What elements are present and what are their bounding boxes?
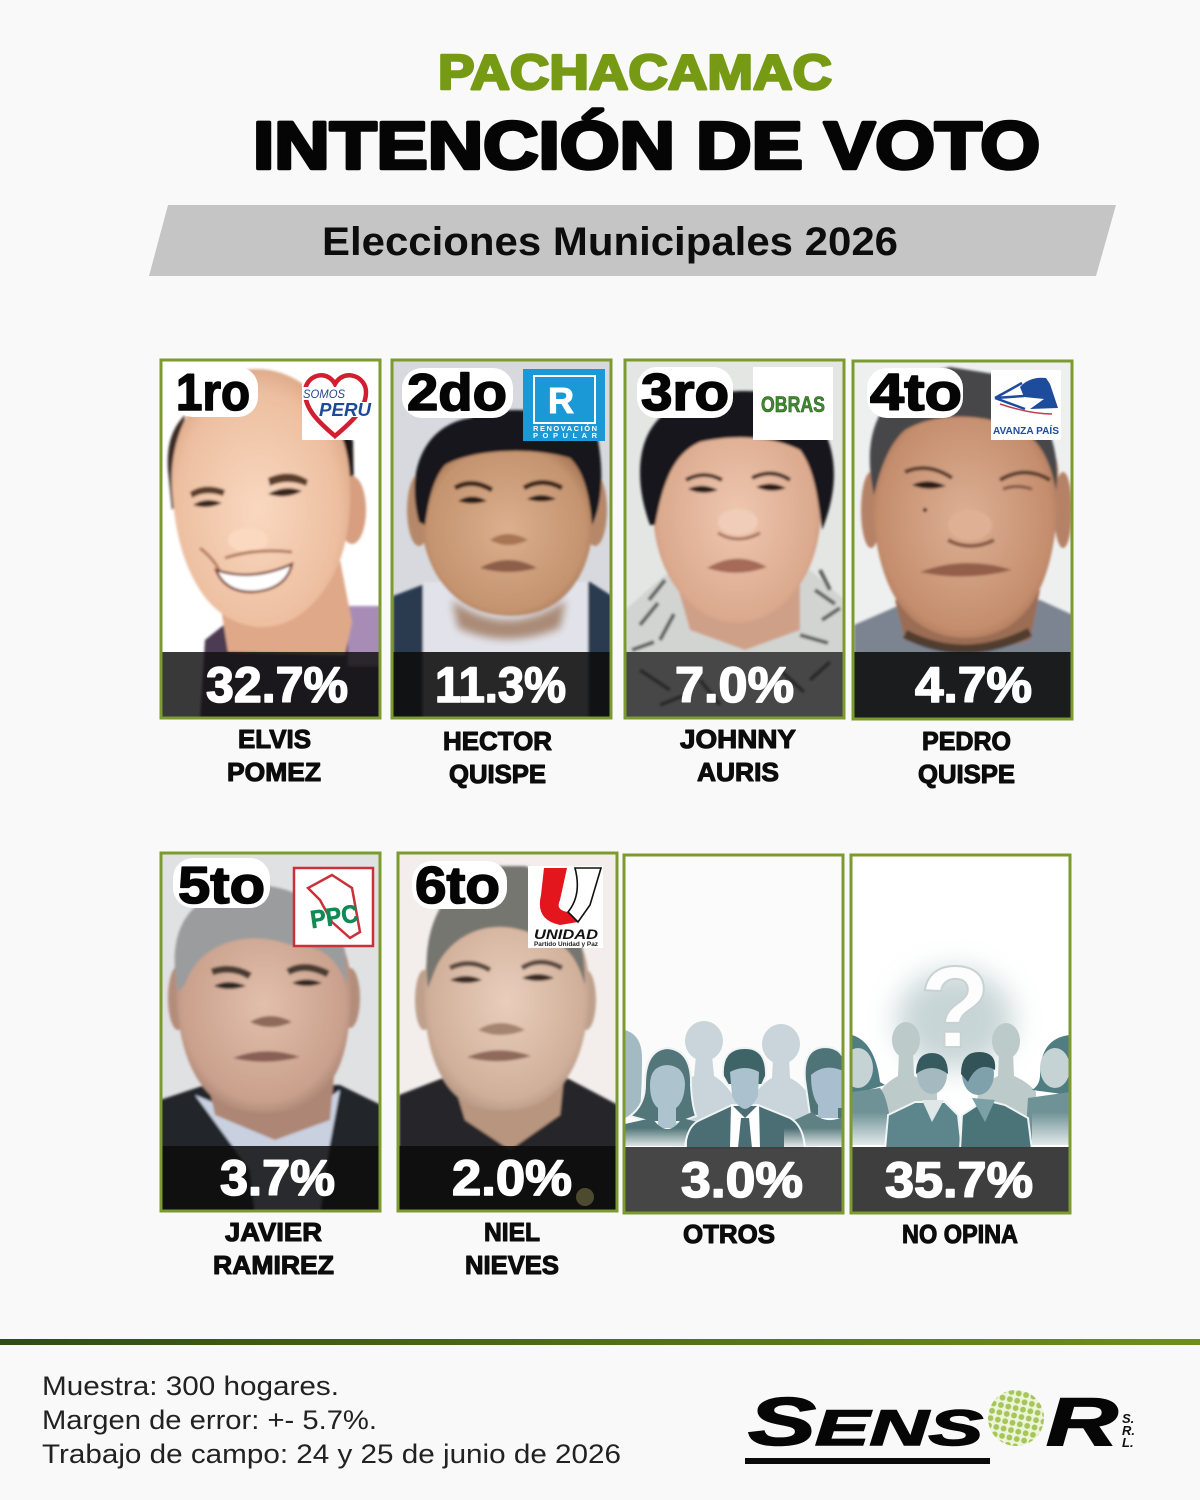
- card: Niel Nieves: [397, 852, 618, 1212]
- methodology notes: [42, 1371, 621, 1469]
- card: Hector Quispe: [391, 359, 612, 719]
- name: Hector Quispe: HECTOR: [443, 726, 552, 756]
- percentage band: [626, 652, 843, 718]
- photo: Javier Ramirez: [160, 885, 381, 1212]
- percentage band: 3.7%: [220, 1150, 335, 1206]
- illustration: crowd silhouettes: [623, 1021, 845, 1150]
- name: Pedro Quispe: QUISPE: [918, 759, 1015, 789]
- logo: Sensor SRL: ENS: [815, 1400, 983, 1456]
- percentage band: 35.7%: [885, 1152, 1033, 1208]
- logo: Sensor SRL: R.: [1122, 1423, 1135, 1438]
- party logo: Unidad: Partido Unidad y Paz: [534, 942, 598, 948]
- name: No opina: NO OPINA: [902, 1219, 1018, 1249]
- party logo: Renovación Popular: R: [548, 380, 574, 421]
- party logo: Somos Peru: PERU: [319, 400, 372, 420]
- rank: 4to: 4to: [870, 364, 962, 422]
- name: Javier Ramirez: JAVIER: [225, 1217, 322, 1247]
- logo: Sensor SRL: S: [748, 1384, 816, 1460]
- percentage band: [393, 652, 611, 718]
- figure: man in jacket: [960, 1052, 1032, 1150]
- percentage band: [852, 1147, 1069, 1213]
- logo: Sensor SRL: S.: [1122, 1411, 1134, 1426]
- percentage band: 3.0%: [681, 1152, 803, 1208]
- figure: woman: [625, 1048, 705, 1146]
- name: Elvis Pomez: [227, 724, 321, 787]
- card: Elvis Pomez: [160, 359, 382, 719]
- illustration: undecided crowd: [852, 956, 1068, 1147]
- percentage band: [625, 1147, 842, 1213]
- percentage band: 4.7%: [915, 657, 1032, 713]
- figure: man in suit: [685, 1048, 805, 1150]
- name: Pedro Quispe: PEDRO: [922, 726, 1011, 756]
- methodology notes: Muestra: 300 hogares.: [42, 1371, 339, 1401]
- party logo: Avanza País: AVANZA PAÍS: [993, 424, 1059, 437]
- rank: 1ro: 1ro: [176, 364, 250, 422]
- name: Niel Nieves: [465, 1217, 559, 1280]
- card: Otros: [623, 854, 845, 1214]
- party logo: Renovación Popular: RENOVACIÓN: [533, 424, 597, 433]
- icon: question mark: ?: [920, 942, 990, 1072]
- name: Javier Ramirez: RAMIREZ: [213, 1250, 334, 1280]
- photo: Niel Nieves: [399, 866, 618, 1212]
- name: Johnny Auris: [680, 724, 796, 787]
- name: Otros: OTROS: [683, 1219, 775, 1249]
- party logo: Unidad: [528, 866, 603, 948]
- title: Intención de voto: INTENCIÓN DE VOTO: [253, 108, 1040, 184]
- methodology notes: Margen de error: +- 5.7%.: [42, 1405, 377, 1435]
- rank: 5to: 5to: [178, 857, 265, 915]
- name: Johnny Auris: JOHNNY: [680, 724, 796, 754]
- percentage band: 2.0%: [452, 1150, 572, 1206]
- rank: 6to: 6to: [415, 857, 500, 915]
- percentage band: [162, 1146, 380, 1211]
- figure: man in suit: [885, 1053, 962, 1150]
- figure: left woman: [852, 1035, 889, 1145]
- name: Javier Ramirez: [213, 1217, 334, 1280]
- subtitle band: [149, 205, 1116, 276]
- percentage band: [399, 1146, 617, 1211]
- party logo: Avanza País: [991, 370, 1061, 440]
- party logo: Somos Peru: [302, 369, 372, 440]
- card: No opina: [843, 854, 1071, 1214]
- party logo: Obras: [753, 367, 833, 440]
- party logo: Renovación Popular: POPULAR: [533, 431, 598, 440]
- photo: Hector Quispe: [393, 410, 612, 719]
- party logo: Unidad: UNIDAD: [534, 926, 598, 942]
- logo: Sensor SRL: L.: [1122, 1435, 1134, 1450]
- name: Hector Quispe: QUISPE: [449, 759, 546, 789]
- figure: far right man: [794, 1046, 842, 1146]
- card: Johnny Auris: [624, 359, 845, 719]
- percentage band: 11.3%: [435, 657, 566, 713]
- percentage band: [854, 652, 1072, 719]
- name: Johnny Auris: AURIS: [697, 757, 779, 787]
- photo: Pedro Quispe: [854, 367, 1073, 720]
- percentage band: [162, 652, 380, 718]
- figure: right woman: [1025, 1035, 1070, 1145]
- card: Pedro Quispe: [852, 360, 1073, 720]
- methodology notes: Trabajo de campo: 24 y 25 de junio de 2026: [42, 1439, 621, 1469]
- name: Elvis Pomez: POMEZ: [227, 757, 321, 787]
- party logo: Somos Peru: SOMOS: [303, 389, 345, 401]
- subtitle band: Elecciones Municipales 2026: [322, 220, 898, 264]
- party logo: Obras: OBRAS: [761, 392, 825, 417]
- photo: Elvis Pomez: [168, 369, 382, 719]
- party logo: PPC: PPC: [309, 900, 360, 934]
- party logo: Renovación Popular: [523, 369, 605, 441]
- title: Pachacamac: PACHACAMAC: [438, 46, 832, 100]
- logo: Sensor SRL: [745, 1384, 1135, 1464]
- rank: 3ro: 3ro: [641, 364, 729, 422]
- percentage band: 7.0%: [675, 657, 794, 713]
- rank: 2do: 2do: [407, 364, 507, 422]
- name: Elvis Pomez: ELVIS: [238, 724, 311, 754]
- name: Niel Nieves: NIEVES: [465, 1250, 559, 1280]
- photo: Johnny Auris: [625, 391, 845, 719]
- logo: Sensor SRL: R: [1046, 1384, 1118, 1460]
- card: Javier Ramirez: [160, 852, 381, 1212]
- percentage band: 32.7%: [206, 657, 348, 713]
- party logo: PPC: [294, 868, 373, 946]
- name: Pedro Quispe: [918, 726, 1015, 789]
- name: Hector Quispe: [443, 726, 552, 789]
- name: Niel Nieves: NIEL: [484, 1217, 540, 1247]
